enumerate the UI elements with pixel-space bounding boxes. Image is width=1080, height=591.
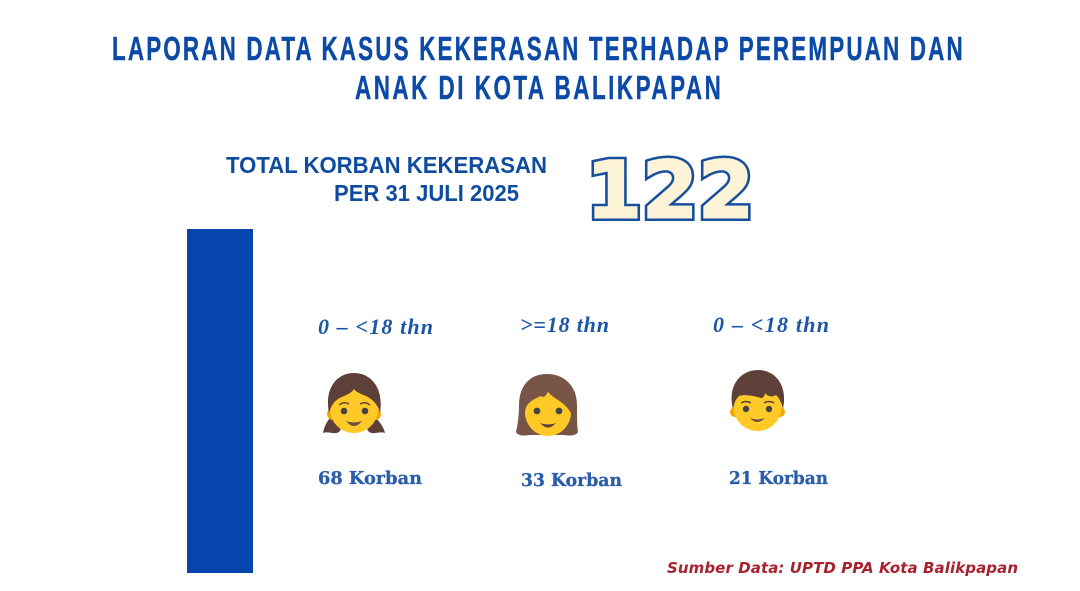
title: LAPORAN DATA KASUS KEKERASAN TERHADAP PEREMPUAN DAN [112,30,963,67]
blue vertical bar [187,229,253,573]
source note: Sumber Data: UPTD PPA Kota Balikpapan [667,559,1018,577]
icon: girl [323,373,385,433]
total number 122: 122 [586,146,754,236]
count: girl: 68 Korban [318,468,422,489]
total label: PER 31 JULI 2025 [334,180,519,206]
total number 122: 122 [586,146,754,236]
title [112,30,963,106]
title: ANAK DI KOTA BALIKPAPAN [355,69,721,106]
column: woman [516,312,622,491]
icon: woman [516,374,578,436]
age label: girl: 0 – <18 thn [318,314,433,339]
total label [226,152,547,206]
age label: woman: >=18 thn [520,312,609,337]
icon: boy [730,370,785,431]
age label: boy: 0 – <18 thn [713,312,829,337]
total label: TOTAL KORBAN KEKERASAN [226,152,547,178]
count: boy: 21 Korban [729,468,828,489]
column: boy [713,312,829,489]
column: girl [318,314,433,489]
count: woman: 33 Korban [521,470,622,491]
